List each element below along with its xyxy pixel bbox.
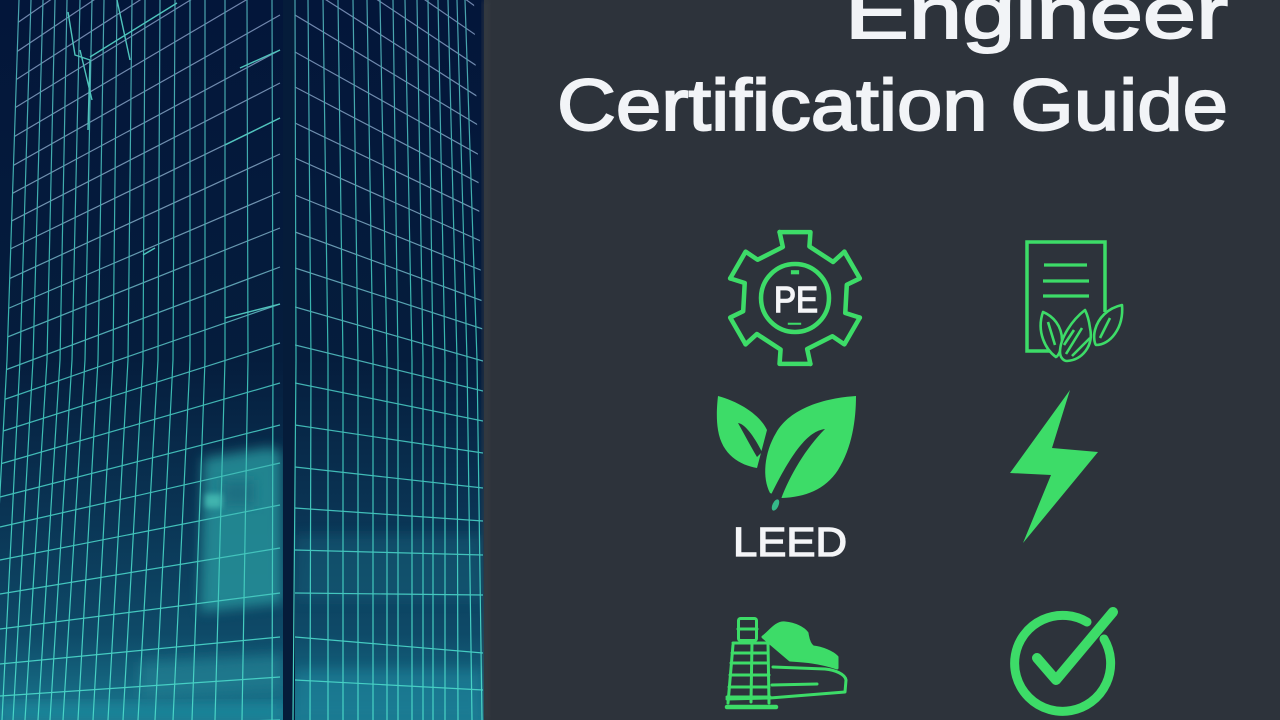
left face vertical grid (0, 0, 273, 720)
label: LEED: LEED (733, 519, 847, 565)
corner gutter (283, 0, 295, 720)
title line: Certification Guide: Certification Guide (557, 66, 1228, 146)
bright streaks near roof (68, 0, 280, 318)
right face horizontal grid (295, 0, 483, 690)
icon: document with leaves (1027, 242, 1122, 361)
icon: PE gear (713, 222, 877, 374)
icon: lightning bolt (1010, 390, 1098, 543)
icon: factory and landscape (727, 618, 846, 707)
right face vertical grid (293, 0, 482, 720)
left face horizontal grid (0, 0, 280, 720)
glow patches on right face (295, 535, 483, 720)
title (557, 0, 1228, 146)
glow patches on left face (0, 447, 282, 720)
panel: wireframe building (0, 0, 489, 720)
building edge shade (483, 0, 489, 720)
icon: LEED leaves (717, 396, 856, 565)
icon: check mark (1015, 612, 1113, 711)
icon: PE gear: PE (774, 279, 818, 320)
